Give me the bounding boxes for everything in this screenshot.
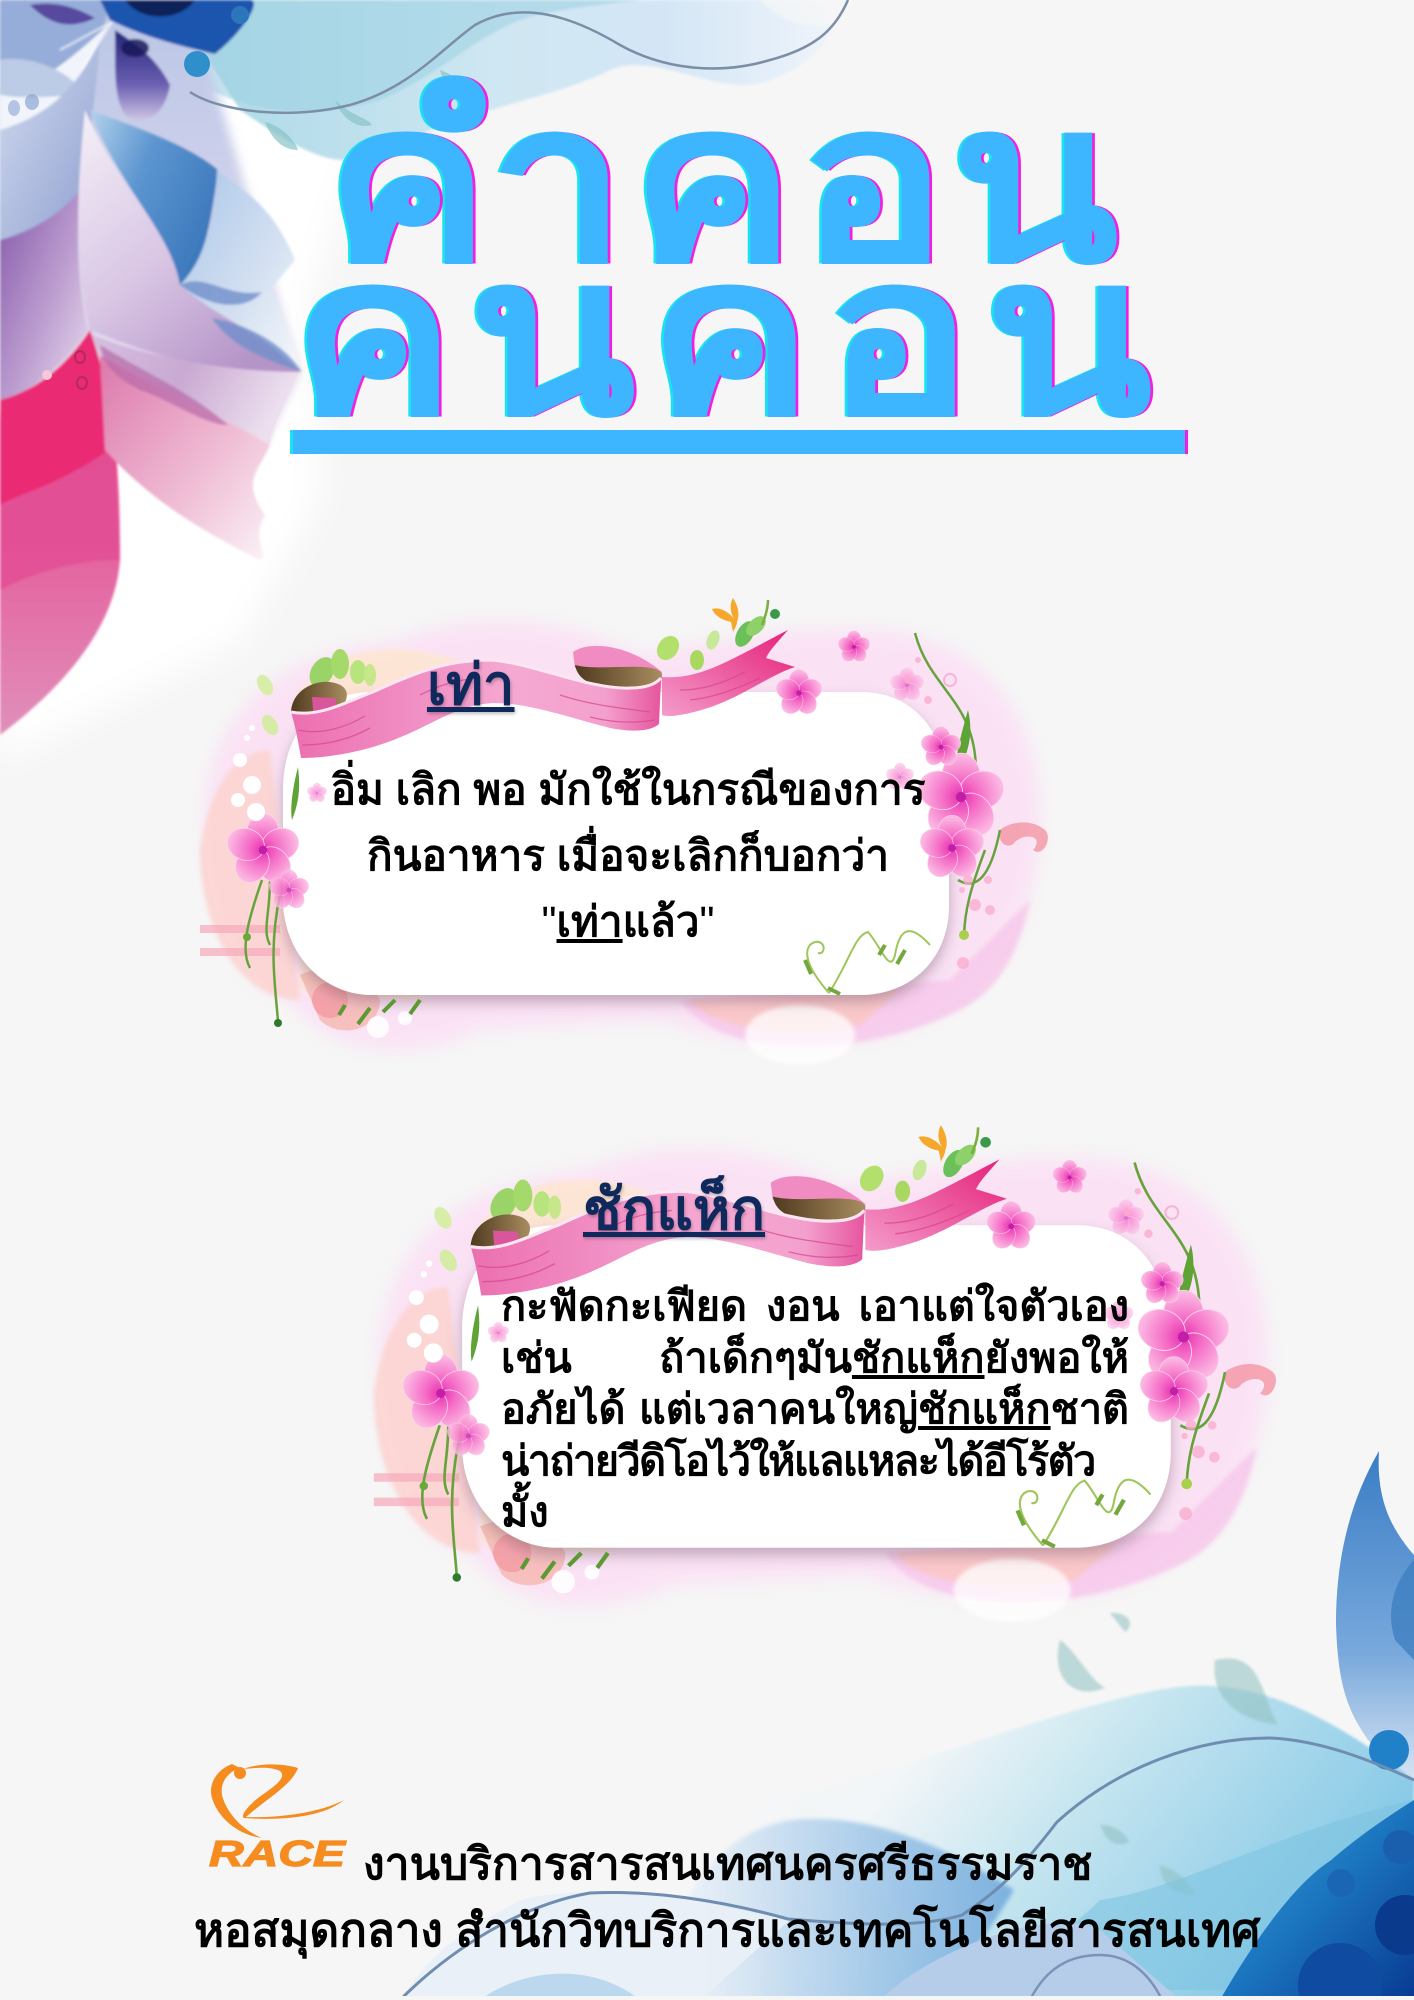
panel: เท่า decoration xyxy=(200,598,1048,1065)
card 2 heading: ชักแห็ก xyxy=(583,1178,765,1242)
card 2 body xyxy=(501,1282,1129,1535)
top-left flower xyxy=(0,0,880,760)
footer text xyxy=(194,1840,1261,1959)
RACE logo: RACE xyxy=(209,1833,346,1874)
RACE logo xyxy=(209,1764,346,1874)
footer text: หอสมุดกลาง สำนักวิทบริการและเทคโนโลยีสารสนเทศ xyxy=(194,1905,1260,1956)
title xyxy=(292,60,1165,461)
card 2 body: เช่น ถ้าเด็กๆมันชักแห็กยังพอให้ xyxy=(501,1334,1129,1380)
card 1 body: อิ่ม เลิก พอ มักใช้ในกรณีของการ xyxy=(331,766,925,813)
card 1 body xyxy=(331,760,926,945)
panel: ชักแห็ก decoration xyxy=(374,1125,1276,1622)
card 1 body: "เท่าแล้ว" xyxy=(541,898,715,945)
card 2 body: กะฟัดกะเฟียด งอน เอาแต่ใจตัวเอง xyxy=(501,1282,1129,1329)
title: คำคอน xyxy=(326,60,1123,308)
card 2 body: มั้ง xyxy=(501,1488,549,1535)
bottom-right flower xyxy=(0,1451,1414,2000)
footer text: งานบริการสารสนเทศนครศรีธรรมราช xyxy=(363,1840,1092,1889)
title: คนคอน xyxy=(292,213,1165,461)
card 2 body: อภัยได้ แต่เวลาคนใหญ่ชักแห็กชาติ xyxy=(501,1385,1129,1432)
card 1 body: กินอาหาร เมื่อจะเลิกก็บอกว่า xyxy=(367,832,889,879)
card 1 heading: เท่า xyxy=(427,653,514,716)
card 2 body: น่าถ่ายวีดิโอไว้ให้แลแหละได้อีโร้ตัว xyxy=(501,1436,1095,1484)
title underline xyxy=(290,430,1188,454)
